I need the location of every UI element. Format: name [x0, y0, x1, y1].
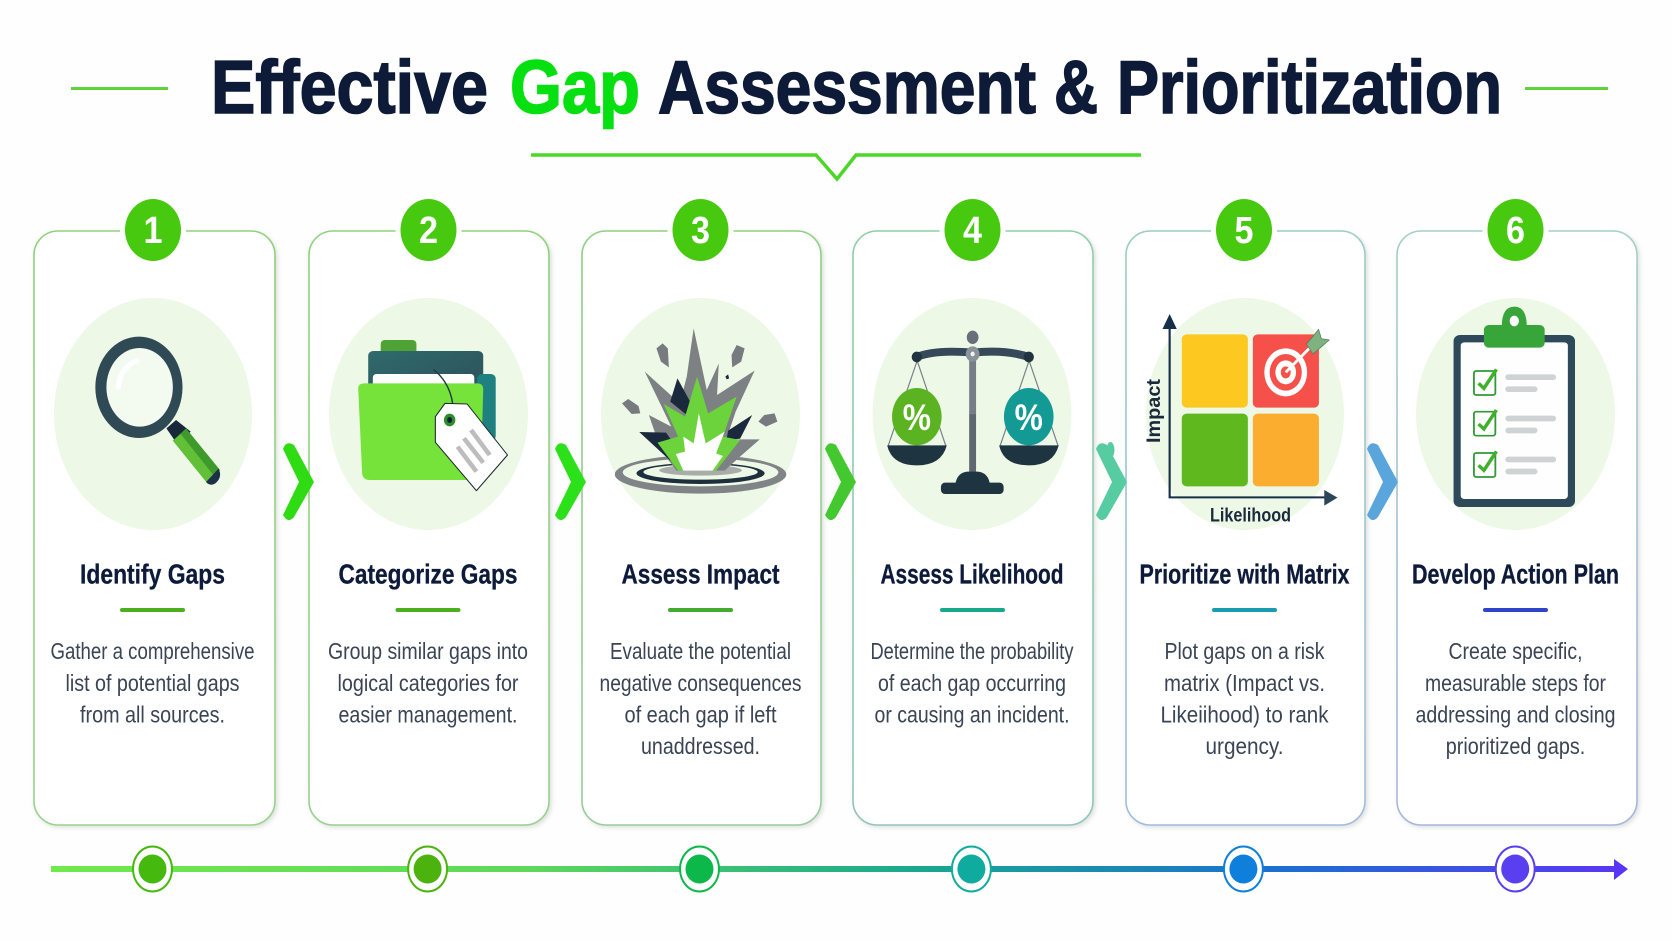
description: prioritized gaps. [1446, 733, 1585, 759]
heading accent [396, 608, 460, 612]
title: Assessment [658, 45, 1036, 129]
number badge 4 [940, 194, 1006, 266]
description: logical categories for [338, 670, 519, 696]
panel: step 2 categorize gaps [309, 194, 549, 825]
description: Plot gaps on a risk [1164, 638, 1325, 664]
heading accent [120, 608, 185, 612]
title: Prioritization [1117, 45, 1502, 129]
number badge 6: 6 [1506, 210, 1525, 252]
icon: explosion impact [615, 328, 786, 494]
heading: Assess Impact [622, 558, 780, 590]
description: Gather a comprehensive [50, 638, 254, 664]
description [50, 638, 254, 728]
number badge 5 [1211, 194, 1277, 266]
description: unaddressed. [641, 733, 760, 759]
icon: risk matrix: Impact [1144, 378, 1165, 443]
number badge 6 [1482, 194, 1548, 266]
description: Create specific, [1448, 638, 1582, 664]
heading accent [940, 608, 1005, 612]
panel: step 1 identify gaps [34, 194, 275, 825]
icon: clipboard checklist [1454, 307, 1575, 507]
description: of each gap if left [624, 702, 777, 728]
description [600, 638, 802, 759]
icon backdrop [872, 298, 1072, 530]
heading: Assess Likelihood [880, 558, 1064, 590]
panel: step 5 prioritize with matrix [1126, 194, 1365, 825]
number badge 1 [120, 194, 186, 266]
description: Group similar gaps into [328, 638, 528, 664]
icon: balance scale with percentages [887, 331, 1059, 494]
number badge 1: 1 [144, 210, 162, 252]
icon backdrop [54, 298, 252, 530]
icon backdrop [601, 298, 800, 530]
heading accent [1483, 608, 1548, 612]
panel: step 6 develop action plan [1397, 194, 1637, 825]
timeline node 2 [408, 846, 447, 892]
icon backdrop [329, 298, 528, 530]
card frame [582, 231, 821, 825]
description: matrix (Impact vs. [1164, 670, 1325, 696]
arrow: step 2 to 3 [555, 443, 586, 520]
title: Effective [211, 45, 488, 129]
card frame [309, 231, 549, 825]
heading: Categorize Gaps [338, 558, 518, 590]
icon: risk matrix: Likelihood [1210, 506, 1291, 526]
description: easier management. [338, 702, 518, 728]
card frame [1397, 231, 1637, 825]
card frame [853, 231, 1093, 825]
description: Evaluate the potential [610, 638, 791, 664]
icon: risk matrix [1144, 314, 1337, 526]
number badge 5: 5 [1234, 210, 1254, 252]
icon: balance scale with percentages: % [1015, 398, 1043, 439]
arrow: step 3 to 4 [825, 443, 856, 520]
title: Gap [510, 45, 640, 129]
description: addressing and closing [1416, 702, 1616, 728]
number badge 3: 3 [691, 210, 710, 252]
description: of each gap occurring [878, 670, 1066, 696]
icon: magnifying glass [95, 337, 220, 485]
icon backdrop [1416, 298, 1615, 530]
description: or causing an incident. [874, 702, 1070, 728]
arrow: step 1 to 2 [283, 443, 314, 520]
description [1416, 638, 1616, 759]
arrow: step 4 to 5 [1096, 442, 1127, 520]
timeline node 4 [952, 846, 991, 892]
icon: folder with tag [358, 340, 507, 491]
icon: balance scale with percentages: % [903, 398, 931, 439]
arrow: step 5 to 6 [1367, 443, 1398, 520]
heading: Develop Action Plan [1412, 558, 1619, 590]
description: Determine the probability [870, 638, 1074, 664]
panel: step 4 assess likelihood [853, 194, 1093, 825]
timeline [51, 846, 1628, 892]
timeline node 6 [1496, 846, 1535, 892]
title: & [1054, 45, 1098, 129]
description [870, 638, 1074, 728]
title underline with notch [531, 155, 1141, 179]
description [1160, 638, 1329, 759]
heading accent [1212, 608, 1277, 612]
number badge 4: 4 [963, 210, 982, 252]
timeline node 3 [680, 846, 719, 892]
description: measurable steps for [1425, 670, 1606, 696]
description [328, 638, 528, 728]
number badge 2 [396, 194, 462, 266]
heading: Identify Gaps [80, 558, 225, 590]
timeline node 5 [1224, 846, 1263, 892]
card frame [34, 231, 275, 825]
description: urgency. [1206, 733, 1284, 759]
title [211, 45, 1502, 129]
description: from all sources. [80, 702, 225, 728]
card frame [1126, 231, 1365, 825]
heading accent [668, 608, 733, 612]
description: negative consequences [600, 670, 802, 696]
number badge 2: 2 [419, 210, 438, 252]
icon backdrop [1146, 298, 1344, 530]
description: Likeiihood) to rank [1160, 702, 1329, 728]
panel: step 3 assess impact [582, 194, 821, 825]
timeline node 1 [133, 846, 172, 892]
heading: Prioritize with Matrix [1140, 558, 1350, 590]
number badge 3 [668, 194, 734, 266]
description: list of potential gaps [66, 670, 240, 696]
